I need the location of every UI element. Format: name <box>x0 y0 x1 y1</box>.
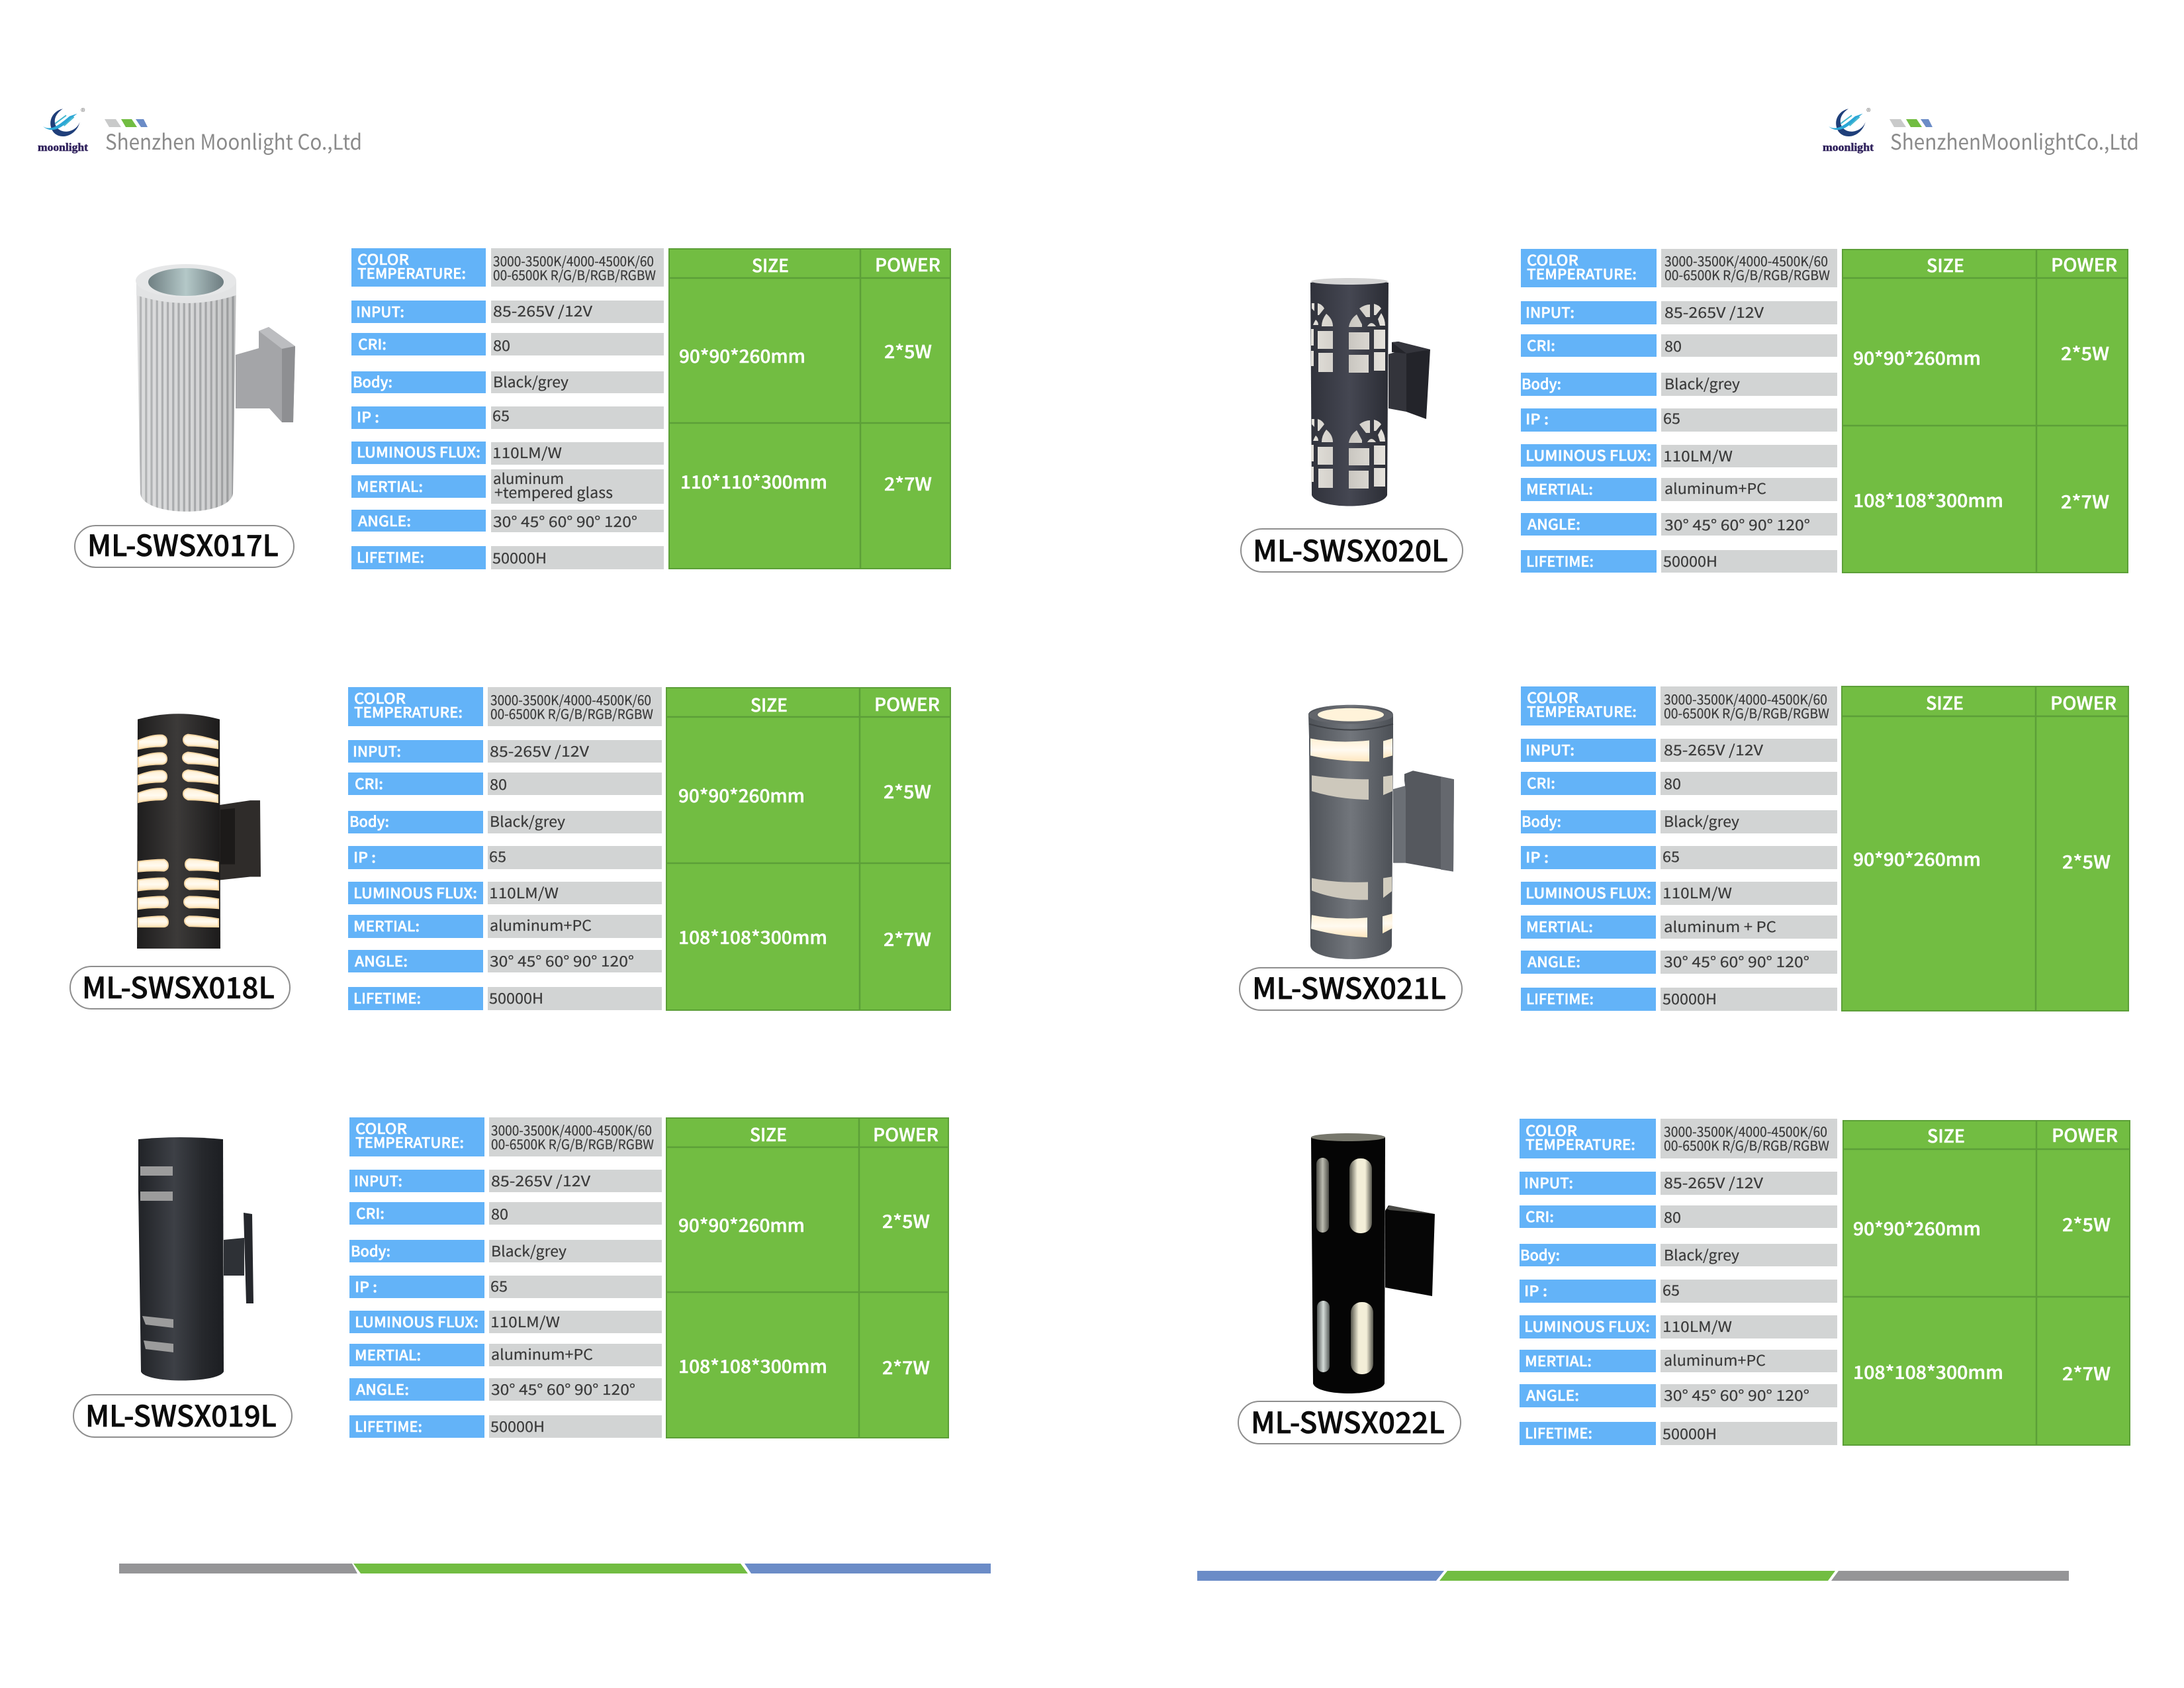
size and power table: 2*7W <box>2061 488 2109 514</box>
spec row: color temperature: 3000-3500K/4000-4500K/60 <box>490 690 651 709</box>
spec row: lifetime: LIFETIME: <box>1525 1422 1592 1443</box>
spec row: angle: 30° 45° 60° 90° 120° <box>493 510 637 532</box>
spec table <box>348 687 662 1010</box>
size and power table: 90*90*260mm <box>1853 845 1981 871</box>
spec row: CRI <box>1521 334 1837 357</box>
model label pill: ML-SWSX021L <box>1252 965 1446 1008</box>
spec row: input: 85-265V /12V <box>1664 301 1764 322</box>
spec row: IP <box>351 404 664 429</box>
size and power table: 2*5W <box>884 338 932 363</box>
size and power table <box>666 688 950 1010</box>
logo: left header <box>38 105 362 156</box>
spec row: lifetime: LIFETIME: <box>353 987 421 1008</box>
size and power table <box>1843 1121 2130 1445</box>
spec row: IP <box>349 1275 662 1298</box>
text: company name: Shenzhen Moonlight Co.,Ltd <box>105 126 362 156</box>
spec row: body: Body: <box>1522 373 1561 394</box>
spec row: material: aluminum+PC <box>1664 1349 1766 1370</box>
spec row: CRI: 80 <box>1664 1206 1681 1227</box>
size and power table: POWER <box>874 690 940 716</box>
spec row: color temperature: TEMPERATURE: <box>1527 263 1637 284</box>
panel: ML-SWSX021L <box>1240 686 2128 1011</box>
spec row: luminous flux <box>1520 1315 1837 1338</box>
spec row: CRI: 80 <box>1664 335 1682 356</box>
model label pill: ML-SWSX020L <box>1253 528 1448 570</box>
panel: ML-SWSX022L <box>1238 1119 2130 1445</box>
spec row: input: 85-265V /12V <box>491 1170 590 1191</box>
spec row: body <box>1521 373 1837 396</box>
model label pill: ML-SWSX019L <box>85 1393 277 1435</box>
size and power table: 2*7W <box>884 470 932 496</box>
size and power table: SIZE <box>1927 1122 1965 1148</box>
spec row: luminous flux: 110LM/W <box>490 1311 560 1332</box>
spec row: body: Body: <box>1520 1244 1560 1265</box>
spec row: luminous flux: 110LM/W <box>492 442 562 463</box>
spec row: material: aluminum <box>493 467 564 489</box>
spec row: angle <box>1521 513 1837 536</box>
spec row: IP: 65 <box>1662 1279 1680 1300</box>
spec row: input <box>1521 301 1837 324</box>
spec row: IP: 65 <box>1663 407 1680 428</box>
spec row: material <box>351 467 664 504</box>
size and power table: POWER <box>2050 689 2116 715</box>
spec row: input: 85-265V /12V <box>1664 1172 1763 1193</box>
spec row: color temperature: TEMPERATURE: <box>355 1131 464 1152</box>
product photo: black lamp with warm horizontal slots <box>137 714 261 949</box>
spec row: body <box>348 810 662 833</box>
spec row: IP: IP : <box>1524 1280 1547 1301</box>
spec row: color temperature: 3000-3500K/4000-4500K/60 <box>491 1120 652 1139</box>
size and power table <box>666 1118 948 1438</box>
spec row: CRI: CRI: <box>1527 334 1555 355</box>
text: registered mark: ® <box>1866 105 1871 118</box>
spec row: luminous flux <box>1521 882 1837 905</box>
model label pill: ML-SWSX022L <box>1251 1399 1445 1442</box>
spec row: angle: 30° 45° 60° 90° 120° <box>1664 1384 1809 1405</box>
spec table <box>351 248 664 569</box>
spec row: material: MERTIAL: <box>1526 915 1593 937</box>
spec row: angle <box>349 1378 662 1401</box>
spec row: material: MERTIAL: <box>355 1344 421 1365</box>
icon: tricolor stripes <box>1889 119 1933 127</box>
spec row: color temperature: 00-6500K R/G/B/RGB/RGBW <box>1664 265 1830 284</box>
spec row: color temperature: 3000-3500K/4000-4500K/60 <box>1664 251 1828 270</box>
panel: ML-SWSX017L <box>75 248 950 569</box>
spec row: body: Black/grey <box>493 371 569 392</box>
product photo: white ribbed wall lamp <box>136 264 295 512</box>
spec row: CRI <box>348 773 662 795</box>
spec row: body: Body: <box>1522 810 1561 831</box>
spec row: input <box>349 1170 662 1192</box>
size and power table: 2*5W <box>884 778 931 804</box>
spec row: angle: 30° 45° 60° 90° 120° <box>491 1378 635 1399</box>
spec row: IP: IP : <box>353 846 376 867</box>
size and power table <box>1843 250 2128 573</box>
spec row: lifetime <box>1521 988 1837 1011</box>
spec row: color temperature: 00-6500K R/G/B/RGB/RGBW <box>490 704 653 723</box>
spec row: color temperature: 00-6500K R/G/B/RGB/RGBW <box>491 1134 654 1153</box>
spec row: material <box>1521 477 1837 501</box>
size and power table: SIZE <box>1926 689 1964 715</box>
spec row: CRI <box>351 333 664 355</box>
spec row: luminous flux: 110LM/W <box>489 882 559 903</box>
spec row: angle: 30° 45° 60° 90° 120° <box>1664 514 1810 535</box>
spec row: lifetime: 50000H <box>1663 550 1717 571</box>
icon: tricolor stripes <box>105 119 148 127</box>
spec row: color temperature: COLOR <box>354 687 406 708</box>
spec row: CRI: 80 <box>490 773 507 794</box>
spec row: color temperature: 3000-3500K/4000-4500K/60 <box>1664 689 1827 708</box>
spec row: material: +tempered glass <box>494 481 613 502</box>
spec row: color temperature <box>349 1117 662 1156</box>
spec row: color temperature: 3000-3500K/4000-4500K/60 <box>493 251 654 270</box>
spec row: color temperature <box>1520 1119 1837 1158</box>
spec row: angle: ANGLE: <box>1527 951 1580 972</box>
icon: moonlight crescent logo <box>1829 109 1866 136</box>
panel: ML-SWSX019L <box>73 1117 948 1438</box>
spec row: input: INPUT: <box>1525 739 1574 760</box>
spec row: material: MERTIAL: <box>357 475 423 496</box>
spec row: material <box>348 914 662 938</box>
size and power table: SIZE <box>1927 252 1964 277</box>
spec row: body: Body: <box>349 810 389 831</box>
size and power table: 90*90*260mm <box>678 782 805 808</box>
spec row: luminous flux: 110LM/W <box>1662 1315 1732 1336</box>
text: registered mark: ® <box>81 105 85 118</box>
size and power table: POWER <box>2051 251 2117 277</box>
size and power table <box>1842 686 2128 1011</box>
spec row: angle: ANGLE: <box>1526 1384 1579 1405</box>
size and power table: 90*90*260mm <box>678 1211 805 1237</box>
size and power table: SIZE <box>752 252 789 277</box>
spec row: lifetime: 50000H <box>1662 1423 1717 1444</box>
spec row: luminous flux: LUMINOUS FLUX: <box>355 1311 478 1332</box>
size and power table: 2*5W <box>882 1207 930 1233</box>
spec row: lifetime: 50000H <box>490 1415 545 1436</box>
spec row: angle: 30° 45° 60° 90° 120° <box>1664 951 1809 972</box>
size and power table: SIZE <box>750 1121 787 1147</box>
spec row: CRI <box>1521 772 1837 795</box>
spec row: input: 85-265V /12V <box>493 300 592 321</box>
size and power table: POWER <box>873 1121 938 1147</box>
spec row: IP <box>1521 407 1837 432</box>
spec row: input <box>1521 739 1837 762</box>
spec row: angle: ANGLE: <box>1527 513 1580 534</box>
spec row: CRI: CRI: <box>356 1202 385 1223</box>
spec row: luminous flux: LUMINOUS FLUX: <box>353 882 477 903</box>
spec row: IP <box>348 845 662 869</box>
spec row: material: aluminum+PC <box>491 1343 593 1364</box>
spec row: luminous flux <box>351 441 664 465</box>
spec row: input <box>1520 1172 1837 1195</box>
size and power table: 90*90*260mm <box>1853 344 1981 370</box>
spec row: lifetime: LIFETIME: <box>355 1415 422 1436</box>
spec row: input <box>348 740 662 763</box>
spec row: input: INPUT: <box>353 740 401 761</box>
size and power table: 2*7W <box>882 1354 930 1380</box>
spec row: color temperature <box>351 248 664 287</box>
spec row: input: INPUT: <box>1525 301 1574 322</box>
spec row: CRI: CRI: <box>1527 772 1555 793</box>
spec row: material: aluminum+PC <box>1664 477 1766 498</box>
spec row: color temperature: COLOR <box>1525 1119 1577 1141</box>
spec row: body: Black/grey <box>1664 373 1741 394</box>
spec row: color temperature: COLOR <box>1527 249 1578 270</box>
spec row: angle <box>348 950 662 972</box>
spec row: angle <box>1520 1384 1837 1407</box>
size and power table: 2*7W <box>884 925 931 951</box>
size and power table: 108*108*300mm <box>1853 487 2003 512</box>
spec row: angle <box>351 510 664 532</box>
spec row: angle: ANGLE: <box>356 1378 409 1399</box>
spec row: material: aluminum+PC <box>490 914 592 935</box>
size and power table: 108*108*300mm <box>678 1352 827 1378</box>
spec row: material: MERTIAL: <box>1525 1350 1592 1371</box>
spec row: input: INPUT: <box>1524 1172 1573 1193</box>
spec table <box>1520 1119 1837 1445</box>
spec row: luminous flux: 110LM/W <box>1663 445 1733 466</box>
spec row: body: Black/grey <box>1664 1244 1740 1265</box>
size and power table: 90*90*260mm <box>679 342 805 368</box>
spec row: lifetime: LIFETIME: <box>1526 550 1594 571</box>
spec row: body: Body: <box>351 1240 390 1261</box>
spec row: luminous flux: LUMINOUS FLUX: <box>1524 1315 1650 1336</box>
spec row: CRI: CRI: <box>355 773 383 794</box>
size and power table: 2*5W <box>2062 848 2111 874</box>
spec row: body <box>351 371 664 393</box>
footer bar: left page <box>119 1564 991 1573</box>
text: moonlight wordmark: moonlight <box>38 141 88 154</box>
icon: moonlight crescent logo <box>43 109 80 136</box>
spec row: luminous flux <box>1521 444 1837 467</box>
text: company name: ShenzhenMoonlightCo.,Ltd <box>1890 126 2139 156</box>
spec row: color temperature: TEMPERATURE: <box>1527 700 1637 722</box>
product photo: charcoal lamp with slit windows <box>138 1137 253 1381</box>
spec row: IP: 65 <box>492 404 510 426</box>
spec row: material <box>1521 915 1837 939</box>
spec row: material <box>349 1343 662 1366</box>
spec row: lifetime <box>1520 1422 1837 1445</box>
panel: ML-SWSX020L <box>1241 249 2128 573</box>
spec row: color temperature: COLOR <box>1527 686 1578 708</box>
size and power table: 2*5W <box>2062 1211 2111 1237</box>
spec row: body: Body: <box>353 371 392 392</box>
spec row: body: Black/grey <box>1664 810 1740 831</box>
spec row: input: 85-265V /12V <box>1664 739 1763 760</box>
model label pill: ML-SWSX017L <box>87 522 279 565</box>
spec row: angle: ANGLE: <box>358 510 411 531</box>
spec row: CRI <box>349 1202 662 1225</box>
spec row: color temperature: TEMPERATURE: <box>1525 1133 1635 1154</box>
spec row: CRI: 80 <box>493 334 510 355</box>
spec row: CRI: 80 <box>1664 773 1681 794</box>
model label pill: ML-SWSX018L <box>82 964 275 1007</box>
spec row: IP: 65 <box>1662 845 1680 867</box>
spec row: IP <box>1521 845 1837 869</box>
spec row: color temperature: COLOR <box>357 248 409 269</box>
product photo: black lamp with glowing vertical slots <box>1311 1133 1435 1393</box>
spec row: IP: IP : <box>1525 846 1549 867</box>
spec row: IP: 65 <box>489 845 506 867</box>
spec row: color temperature: 00-6500K R/G/B/RGB/RGBW <box>493 265 656 284</box>
spec row: luminous flux <box>348 882 662 904</box>
logo: right header <box>1823 105 2139 156</box>
size and power table: 2*5W <box>2061 340 2109 365</box>
size and power table: POWER <box>2052 1121 2118 1147</box>
spec row: lifetime: LIFETIME: <box>1526 988 1594 1009</box>
footer bar: right page <box>1197 1571 2069 1581</box>
spec row: CRI: CRI: <box>1525 1205 1554 1227</box>
spec row: input <box>351 300 664 323</box>
spec row: luminous flux <box>349 1311 662 1333</box>
spec row: body <box>349 1240 662 1262</box>
size and power table: POWER <box>875 251 940 277</box>
spec row: color temperature: 00-6500K R/G/B/RGB/RGBW <box>1664 703 1829 722</box>
spec row: color temperature <box>1521 249 1837 287</box>
spec row: input: INPUT: <box>356 301 404 322</box>
spec row: body <box>1521 810 1837 833</box>
spec row: luminous flux: LUMINOUS FLUX: <box>1525 444 1651 465</box>
spec row: CRI <box>1520 1205 1837 1228</box>
spec row: IP: 65 <box>490 1275 508 1296</box>
text: moonlight wordmark: moonlight <box>1823 141 1874 154</box>
spec table <box>1521 686 1837 1011</box>
spec row: lifetime: 50000H <box>489 987 543 1008</box>
spec row: color temperature: TEMPERATURE: <box>354 701 463 722</box>
size and power table: 108*108*300mm <box>1853 1358 2003 1384</box>
size and power table: 108*108*300mm <box>678 923 827 949</box>
size and power table: 2*7W <box>2062 1360 2111 1385</box>
spec row: material: MERTIAL: <box>1526 478 1593 499</box>
spec table <box>349 1117 662 1438</box>
size and power table: 90*90*260mm <box>1853 1215 1981 1241</box>
spec row: body <box>1520 1244 1837 1266</box>
spec row: angle <box>1521 951 1837 974</box>
spec table <box>1521 249 1837 573</box>
spec row: angle: 30° 45° 60° 90° 120° <box>490 950 634 971</box>
spec row: material: aluminum + PC <box>1664 915 1776 937</box>
spec row: input: INPUT: <box>354 1170 402 1191</box>
spec row: IP: IP : <box>1525 408 1549 429</box>
spec row: luminous flux: LUMINOUS FLUX: <box>357 441 480 462</box>
product photo: grey lamp with banded glass windows <box>1308 705 1454 959</box>
spec row: color temperature <box>348 687 662 726</box>
spec row: lifetime <box>351 546 664 569</box>
spec row: CRI: CRI: <box>358 333 387 354</box>
size and power table <box>669 249 950 569</box>
spec row: body: Black/grey <box>490 810 566 831</box>
spec row: input: 85-265V /12V <box>490 740 589 761</box>
spec row: color temperature: TEMPERATURE: <box>357 262 466 283</box>
spec row: color temperature: 00-6500K R/G/B/RGB/RGBW <box>1664 1135 1829 1154</box>
spec row: lifetime <box>1521 550 1837 573</box>
spec row: color temperature: 3000-3500K/4000-4500K/60 <box>1664 1121 1827 1141</box>
spec row: color temperature: COLOR <box>355 1117 407 1139</box>
panel: ML-SWSX018L <box>70 687 950 1010</box>
spec row: IP <box>1520 1279 1837 1303</box>
spec row: material: MERTIAL: <box>353 915 420 936</box>
spec row: IP: IP : <box>357 406 379 427</box>
size and power table: SIZE <box>751 691 788 717</box>
spec row: luminous flux: 110LM/W <box>1662 882 1732 903</box>
product photo: slate lamp with arched window cut-outs <box>1310 278 1430 506</box>
spec row: angle: ANGLE: <box>355 950 408 971</box>
spec row: CRI: 80 <box>491 1203 508 1224</box>
spec row: lifetime: LIFETIME: <box>357 546 424 567</box>
spec row: color temperature <box>1521 686 1837 726</box>
spec row: IP: IP : <box>355 1276 377 1297</box>
spec row: luminous flux: LUMINOUS FLUX: <box>1525 882 1651 903</box>
spec row: material <box>1520 1349 1837 1372</box>
spec row: lifetime <box>349 1415 662 1438</box>
spec row: lifetime: 50000H <box>1662 988 1717 1009</box>
size and power table: 110*110*300mm <box>680 468 827 494</box>
spec row: lifetime: 50000H <box>492 547 547 568</box>
spec row: body: Black/grey <box>491 1240 567 1261</box>
spec row: lifetime <box>348 987 662 1010</box>
